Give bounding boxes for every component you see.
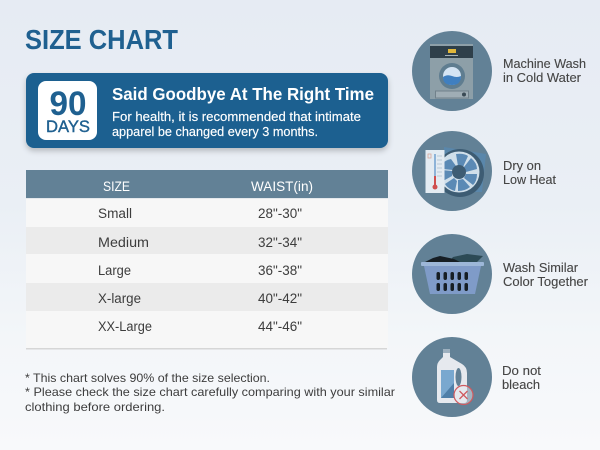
label: bleach [502, 363, 541, 392]
table header: SIZE [103, 179, 130, 194]
row: XX-Large: XX-Large [98, 319, 152, 334]
row: X-large: 40"-42" [258, 291, 302, 306]
banner: 90 days [26, 73, 388, 148]
label: wash similar: Wash Similar [503, 260, 579, 275]
row: Small: 28"-30" [258, 206, 302, 221]
size table [26, 170, 388, 350]
label: wash similar [503, 260, 589, 289]
badge: 90 days: 90 [50, 85, 86, 123]
icon: bleach bottle [412, 337, 492, 417]
label: dry: Dry on [503, 158, 541, 173]
banner text [112, 110, 361, 139]
banner heading: Said Goodbye At The Right Time [112, 84, 374, 104]
banner text: For health, it is recommended that intimate [112, 110, 361, 124]
icon: dryer fan [412, 131, 492, 211]
label: dry [503, 158, 556, 187]
row: Large: Large [98, 263, 131, 278]
row: Small [26, 199, 388, 227]
icon: washing machine [412, 31, 492, 111]
row: Medium: Medium [98, 235, 149, 250]
row: Large: 36"-38" [258, 263, 302, 278]
row: XX-Large: 44"-46" [258, 319, 302, 334]
label: machine wash: in Cold Water [503, 70, 582, 85]
row: X-large [26, 283, 388, 311]
label: bleach: bleach [502, 377, 540, 392]
row: Small: Small [98, 206, 132, 221]
row: XX-Large [26, 311, 388, 348]
label: bleach: Do not [502, 363, 541, 378]
table header [26, 170, 388, 198]
footnotes [25, 371, 395, 414]
row: Medium: 32"-34" [258, 235, 302, 250]
label: dry: Low Heat [503, 172, 556, 187]
row: Large [26, 254, 388, 283]
row: Medium [26, 227, 388, 254]
footnotes: * This chart solves 90% of the size selection. [25, 371, 270, 385]
badge: 90 days: DAYS [46, 117, 90, 136]
label: wash similar: Color Together [503, 274, 589, 289]
banner text: apparel be changed every 3 months. [112, 125, 318, 139]
footnotes: * Please check the size chart carefully comparing with your similar [25, 385, 395, 399]
label: machine wash [503, 56, 586, 85]
icon: laundry basket [412, 234, 492, 314]
table header: WAIST(in) [251, 179, 313, 194]
footnotes: clothing before ordering. [25, 400, 165, 414]
label: machine wash: Machine Wash [503, 56, 586, 71]
row: X-large: X-large [98, 291, 141, 306]
badge: 90 days [38, 81, 97, 140]
title: SIZE CHART [25, 24, 178, 55]
